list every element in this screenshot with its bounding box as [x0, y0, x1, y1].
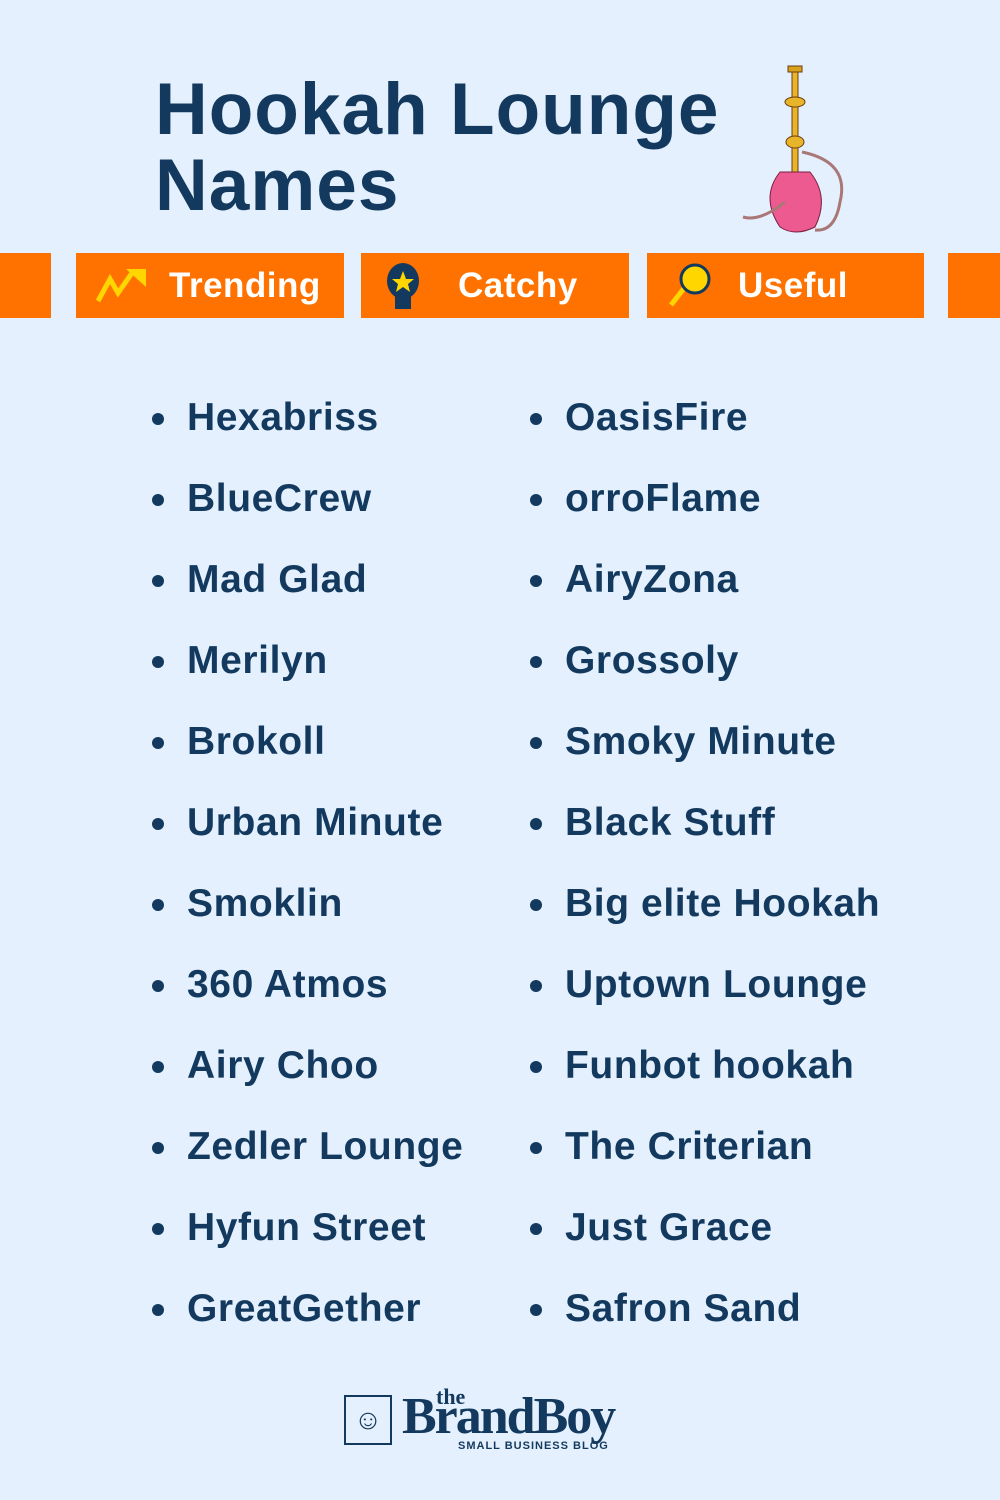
title: Hookah Lounge: [155, 69, 720, 150]
list: left column: 360 Atmos: [187, 963, 388, 1006]
list: right column: Uptown Lounge: [565, 963, 867, 1006]
tab: trending: Trending: [169, 266, 321, 305]
icon: hookah: [742, 66, 844, 232]
list: left column: GreatGether: [187, 1287, 421, 1330]
title: [155, 69, 720, 226]
list: left column: [152, 396, 463, 1330]
list: left column: Urban Minute: [187, 801, 443, 844]
list: right column: Funbot hookah: [565, 1044, 854, 1087]
logo: the: [436, 1384, 465, 1409]
list: right column: Just Grace: [565, 1206, 773, 1249]
list: left column: Brokoll: [187, 720, 326, 763]
tab: left edge: [0, 253, 51, 318]
tab: useful: [647, 253, 924, 318]
list: right column: The Criterian: [565, 1125, 813, 1168]
list: right column: AiryZona: [565, 558, 739, 601]
tab: catchy: [361, 253, 629, 318]
list: right column: Black Stuff: [565, 801, 775, 844]
list: right column: Big elite Hookah: [565, 882, 880, 925]
tab: trending: [76, 253, 344, 318]
list: right column: Safron Sand: [565, 1287, 801, 1330]
list: right column: OasisFire: [565, 396, 748, 439]
list: left column: Merilyn: [187, 639, 328, 682]
list: left column: Smoklin: [187, 882, 343, 925]
list: left column: Zedler Lounge: [187, 1125, 463, 1168]
list: left column: BlueCrew: [187, 477, 372, 520]
tab: right edge: [948, 253, 1000, 318]
list: left column: Airy Choo: [187, 1044, 379, 1087]
list: right column: orroFlame: [565, 477, 761, 520]
list: left column: Hexabriss: [187, 396, 379, 439]
list: right column: [530, 396, 880, 1330]
logo: [344, 1384, 616, 1452]
list: left column: Mad Glad: [187, 558, 367, 601]
logo: SMALL BUSINESS BLOG: [458, 1440, 609, 1452]
list: right column: Smoky Minute: [565, 720, 837, 763]
list: right column: Grossoly: [565, 639, 739, 682]
tab: useful: Useful: [738, 266, 848, 305]
title: Names: [155, 145, 399, 226]
tab: catchy: Catchy: [458, 266, 578, 305]
logo: BrandBoy: [402, 1388, 614, 1445]
logo: ☺: [354, 1404, 382, 1435]
list: left column: Hyfun Street: [187, 1206, 426, 1249]
